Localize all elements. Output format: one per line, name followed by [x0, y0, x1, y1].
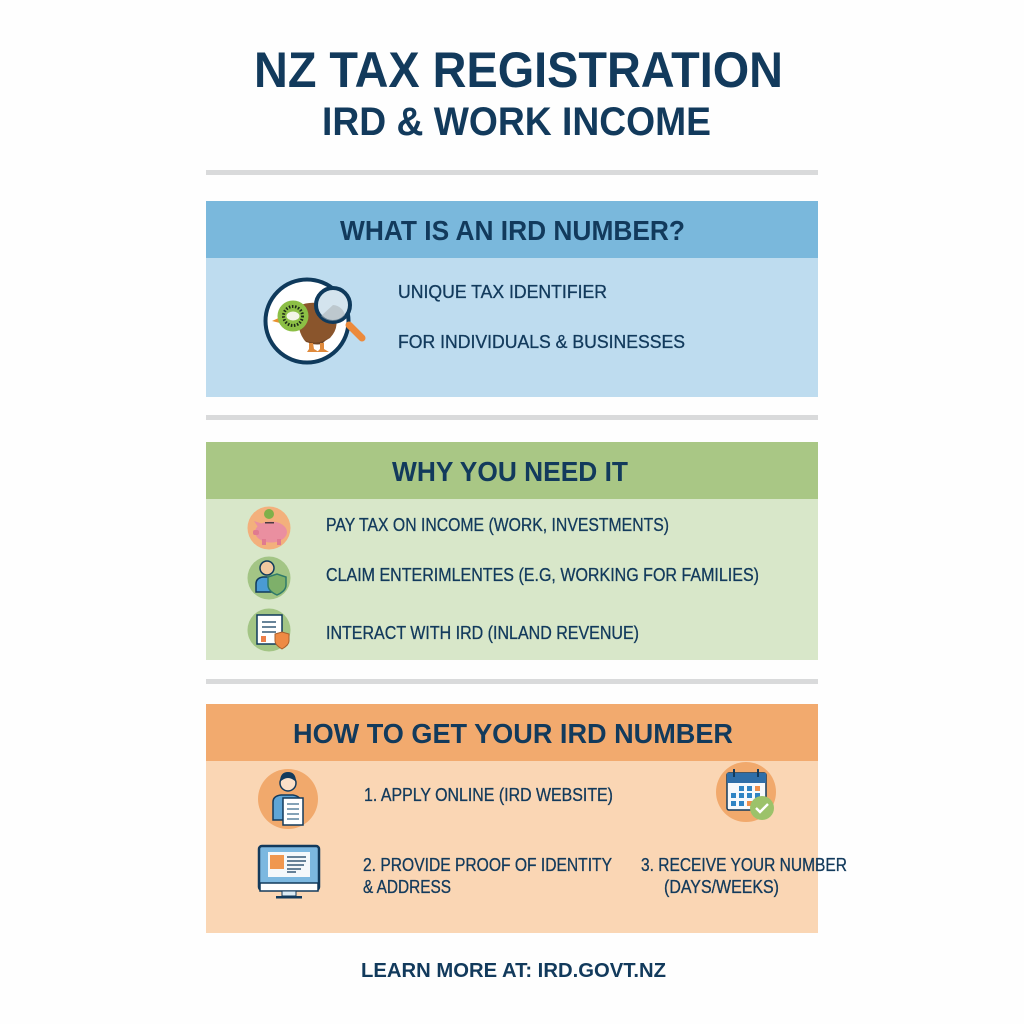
title: IRD & WORK INCOME — [322, 100, 711, 144]
panel: what is an IRD number — [206, 201, 818, 397]
footer: learn more: LEARN MORE AT: IRD.GOVT.NZ — [361, 960, 666, 982]
text: claim entitlements: CLAIM ENTERIMLENTES (E.G, WORKING FOR FAMILIES) — [326, 565, 759, 585]
panel: why you need it — [206, 442, 818, 660]
icon: person with shield — [248, 556, 290, 600]
text: interact with IRD: INTERACT WITH IRD (INLAND REVENUE) — [326, 623, 639, 643]
text: pay tax on income: PAY TAX ON INCOME (WORK, INVESTMENTS) — [326, 515, 669, 535]
icon: piggy bank — [248, 506, 290, 550]
icon: kiwi with magnifying glass — [266, 280, 362, 362]
text: step 3: 3. RECEIVE YOUR NUMBER — [641, 855, 847, 875]
heading: why you need it: WHY YOU NEED IT — [392, 456, 628, 487]
text: unique tax identifier: UNIQUE TAX IDENTIFIER — [398, 282, 607, 302]
heading: how to get your IRD number: HOW TO GET YOUR IRD NUMBER — [293, 718, 733, 749]
title — [254, 42, 783, 144]
text: step 1: 1. APPLY ONLINE (IRD WEBSITE) — [364, 785, 613, 805]
panel: how to get your IRD number: & ADDRESS — [363, 877, 451, 897]
panel: how to get your IRD number — [206, 704, 847, 933]
text: step 2: 2. PROVIDE PROOF OF IDENTITY — [363, 855, 612, 875]
title: NZ TAX REGISTRATION — [254, 42, 783, 98]
panel: how to get your IRD number: (DAYS/WEEKS) — [664, 877, 779, 897]
text: for individuals and businesses: FOR INDIVIDUALS & BUSINESSES — [398, 332, 685, 352]
heading: what is an IRD number: WHAT IS AN IRD NUMBER? — [340, 215, 685, 246]
icon: person with form — [258, 769, 318, 829]
icon: document with shield — [248, 608, 290, 652]
icon: calendar with check — [716, 762, 776, 822]
icon: computer monitor — [259, 846, 319, 898]
